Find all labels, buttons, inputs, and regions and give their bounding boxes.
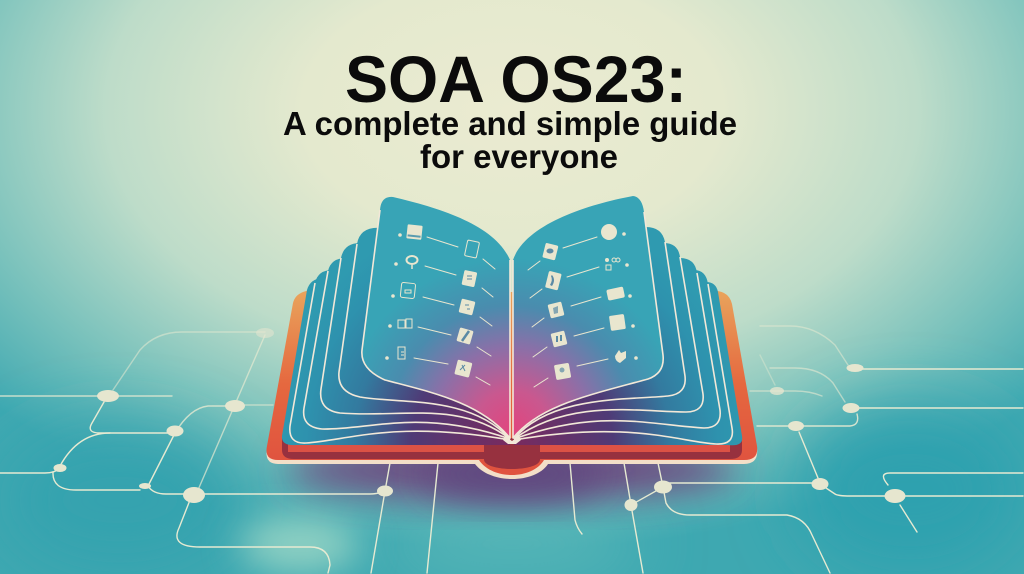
right circuit lines (624, 326, 1023, 573)
tile glyphs (546, 248, 564, 372)
subtitle line 2: for everyone (420, 138, 618, 175)
tile glyphs (460, 276, 472, 371)
icon: magnifier (406, 256, 418, 269)
row dots (385, 233, 402, 360)
left page stack (282, 197, 510, 445)
icon: box outline (400, 282, 416, 299)
network lines and nodes (0, 326, 1023, 573)
dark spine strips (282, 438, 742, 469)
icon: folders (398, 319, 412, 328)
icon: window (406, 224, 423, 240)
book cover (266, 290, 757, 479)
nodes (54, 328, 906, 511)
icon: nodes (606, 258, 620, 270)
title block (283, 42, 737, 175)
connector lines (528, 237, 608, 387)
icon tiles (454, 240, 480, 378)
spine page fan (503, 436, 521, 444)
row dots (622, 232, 638, 360)
icon: badge (615, 350, 626, 363)
right page index (528, 224, 638, 387)
icon: card (606, 286, 625, 301)
left page index (385, 224, 495, 385)
icon: document (398, 347, 405, 359)
icon tiles (542, 243, 571, 380)
subtitle line 1: A complete and simple guide (283, 105, 737, 142)
connector lines (414, 237, 495, 385)
icon: photo stack (609, 314, 626, 331)
left circuit lines (0, 332, 582, 573)
right page stack (513, 196, 742, 445)
open book illustration (266, 196, 757, 479)
heading: SOA OS23: (345, 42, 687, 116)
icon: circle (601, 224, 617, 240)
